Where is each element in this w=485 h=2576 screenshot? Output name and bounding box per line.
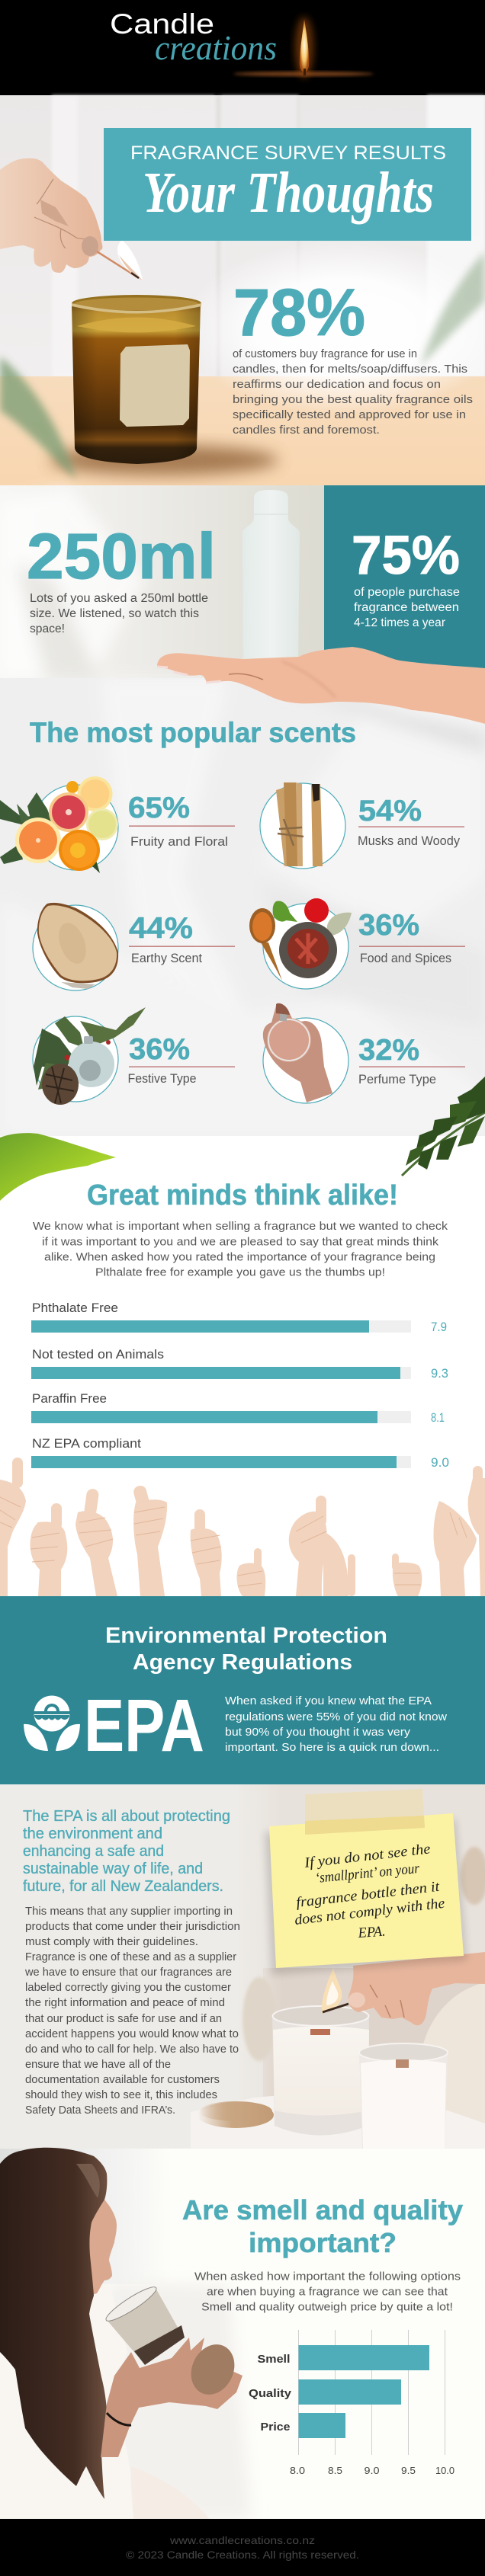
cork lid — [183, 2338, 242, 2402]
woman smelling candle photo — [0, 2148, 252, 2519]
hand holding bottle — [157, 647, 485, 724]
amber candle jar — [72, 295, 201, 464]
percent: 54% — [358, 795, 422, 827]
logo word: Candle: Candle — [110, 8, 214, 40]
axis labels: 9.0 — [365, 2465, 380, 2476]
EPA body text: that our product is safe for use and if an — [25, 2013, 222, 2025]
footer — [0, 2519, 485, 2576]
scent: festive — [33, 1007, 235, 1105]
title line 1: FRAGRANCE SURVEY RESULTS — [130, 142, 446, 164]
teal stat panel — [324, 485, 485, 672]
row: Phthalate Free: Phthalate Free — [32, 1301, 118, 1315]
note text: EPA. — [357, 1924, 386, 1941]
stat: 78%: 78% — [233, 276, 365, 350]
icon: candle flame — [233, 17, 374, 78]
hair — [0, 2148, 107, 2499]
row: NZ EPA compliant: NZ EPA compliant — [32, 1436, 141, 1451]
note text: ‘smallprint’ on your — [314, 1861, 420, 1886]
white bottle — [242, 490, 300, 661]
row: Phthalate Free — [31, 1301, 447, 1334]
description: When asked how important the following options — [194, 2270, 461, 2283]
right blurred leaf — [421, 251, 485, 366]
note text: fragrance bottle then it — [295, 1879, 441, 1911]
78% description: reaffirms our dedication and focus on — [233, 379, 441, 391]
note text — [294, 1841, 445, 1941]
row: Paraffin Free — [31, 1391, 445, 1425]
icon: spices — [249, 898, 352, 981]
note text: does not comply with the — [294, 1896, 445, 1928]
EPA body text: we have to ensure that our fragrances are — [24, 1966, 232, 1979]
description: are when buying a fragrance we can see that — [207, 2286, 448, 2298]
percent: 36% — [129, 1033, 190, 1066]
250ml description: size. We listened, so watch this — [30, 607, 199, 620]
EPA wordmark: EPA — [84, 1684, 204, 1767]
intro paragraph: Plthalate free for example you gave us the thumbs up! — [95, 1266, 385, 1278]
axis labels: 8.0 — [290, 2465, 305, 2476]
candle label — [120, 344, 190, 427]
stat: 75%: 75% — [352, 526, 460, 586]
face — [76, 2194, 117, 2296]
row: NZ EPA compliant — [31, 1436, 449, 1470]
shirt — [0, 2283, 133, 2519]
78% description — [233, 348, 473, 437]
axis labels — [290, 2465, 454, 2476]
EPA body text — [24, 1906, 240, 2117]
bar: smell — [299, 2345, 429, 2370]
75% description — [354, 586, 460, 629]
panel: great minds think alike — [0, 1077, 485, 1596]
icon: citrus fruit — [0, 776, 118, 873]
EPA body text: the right information and peace of mind — [25, 1997, 225, 2009]
footer: www.candlecreations.co.nz — [169, 2534, 315, 2546]
row: Not tested on Animals: 9.3 — [431, 1366, 448, 1381]
bar: quality — [299, 2379, 401, 2405]
EPA body text: documentation available for customers — [25, 2074, 220, 2086]
EPA body text: accident happens you would know what to — [25, 2028, 239, 2040]
scent: food and spices — [249, 898, 465, 989]
table — [191, 2091, 485, 2149]
note text: If you do not see the — [303, 1841, 431, 1871]
250ml description — [30, 592, 208, 635]
row: Not tested on Animals: Not tested on Animals — [32, 1347, 164, 1362]
dried grasses — [242, 1977, 276, 2061]
78% description: candles, then for melts/soap/diffusers. This — [233, 363, 467, 376]
EPA highlighted statement: The EPA is all about protecting — [23, 1807, 230, 1825]
logo word: creations: creations — [155, 28, 277, 67]
EPA body text: labeled correctly giving you the customer — [25, 1982, 231, 1994]
EPA intro text: important. So here is a quick run down... — [225, 1741, 439, 1754]
250ml description: Lots of you asked a 250ml bottle — [30, 592, 208, 605]
EPA body text: products that come under their jurisdiction — [25, 1921, 240, 1933]
scent: perfume — [263, 1003, 465, 1103]
hand holding note — [348, 1952, 485, 2025]
header band — [0, 0, 485, 95]
75% description: fragrance between — [354, 601, 459, 614]
icon: EPA flower logo — [24, 1696, 80, 1751]
percent: 65% — [128, 792, 190, 824]
vase — [422, 1982, 485, 2123]
row: Phthalate Free: 7.9 — [431, 1320, 447, 1334]
label: Perfume Type — [358, 1073, 436, 1086]
intro paragraph: We know what is important when selling a fragrance but we wanted to check — [33, 1221, 448, 1233]
bar chart: ratings — [31, 1301, 449, 1470]
thumbs up hands — [0, 1458, 485, 1596]
intro paragraph: if it was important to you and we are pleased to say that great minds think — [42, 1236, 439, 1248]
EPA highlighted statement: future, for all New Zealanders. — [23, 1877, 223, 1895]
intro paragraph — [33, 1221, 448, 1278]
row: NZ EPA compliant: 9.0 — [431, 1455, 449, 1470]
icon: fern leaf — [402, 1077, 485, 1176]
scent: musks and woody — [260, 782, 464, 869]
EPA intro text: but 90% of you thought it was very — [225, 1726, 411, 1739]
sticky note — [265, 1789, 467, 1975]
percent: 32% — [358, 1034, 419, 1067]
heading: Are smell and quality — [182, 2194, 463, 2226]
hand holding match — [0, 158, 143, 280]
row: Not tested on Animals — [31, 1347, 448, 1381]
candle jar 1 — [272, 2006, 369, 2135]
EPA intro text — [225, 1694, 447, 1754]
75% description: 4-12 times a year — [354, 616, 445, 629]
bar labels — [249, 2353, 292, 2434]
axis labels: 8.5 — [328, 2465, 342, 2476]
tape — [305, 1789, 425, 1835]
heading: Great minds think alike! — [87, 1179, 398, 1211]
EPA intro text: When asked if you knew what the EPA — [225, 1694, 432, 1707]
stat: 250ml: 250ml — [27, 520, 216, 592]
EPA highlighted statement: sustainable way of life, and — [23, 1860, 203, 1877]
icon: holly, bauble and pine cone — [34, 1007, 146, 1105]
bar labels: Price — [261, 2421, 290, 2434]
flame and match — [322, 1968, 348, 2013]
left blurred leaf — [0, 357, 76, 480]
panel: most popular scents — [0, 647, 485, 1136]
percent: 36% — [358, 909, 419, 942]
heading — [105, 1624, 387, 1675]
EPA body text: must comply with their guidelines. — [25, 1936, 198, 1948]
arms and hands — [101, 2338, 242, 2457]
EPA body text: do and who to call for help. We also have to — [25, 2043, 239, 2056]
icon: hand with perfume — [263, 1003, 332, 1102]
78% description: candles first and foremost. — [233, 424, 380, 437]
icon: wood slice — [37, 903, 118, 989]
78% description: bringing you the best quality fragrance oils — [233, 394, 473, 406]
footer: © 2023 Candle Creations. All rights reserved. — [126, 2549, 359, 2561]
description: Smell and quality outweigh price by quite a lot! — [201, 2301, 453, 2313]
bar labels: Quality — [249, 2387, 292, 2400]
intro paragraph: alike. When asked how you rated the importance of your fragrance being — [44, 1251, 435, 1263]
title box — [104, 128, 471, 241]
label: Fruity and Floral — [130, 835, 228, 849]
label: Musks and Woody — [358, 834, 461, 848]
axis labels: 9.5 — [401, 2465, 416, 2476]
panel: smell and quality — [0, 2148, 485, 2519]
250ml description: space! — [30, 622, 65, 635]
percent: 44% — [129, 912, 193, 945]
candle photo — [191, 1784, 485, 2149]
bar labels: Smell — [258, 2353, 290, 2366]
75% description: of people purchase — [354, 586, 460, 599]
scents heading: The most popular scents — [30, 717, 356, 748]
label: Festive Type — [128, 1072, 197, 1086]
label: Earthy Scent — [131, 952, 202, 965]
heading: Environmental Protection — [105, 1624, 387, 1648]
row: Paraffin Free: Paraffin Free — [32, 1391, 107, 1406]
row: Paraffin Free: 8.1 — [431, 1410, 445, 1425]
panel: bottle size — [0, 485, 485, 678]
panel: EPA explanation — [0, 1784, 485, 2149]
EPA highlighted statement — [23, 1807, 230, 1895]
heading — [182, 2194, 463, 2258]
EPA body text: Fragrance is one of these and as a supplier — [25, 1951, 236, 1963]
EPA highlighted statement: enhancing a safe and — [23, 1842, 164, 1860]
EPA highlighted statement: the environment and — [23, 1825, 162, 1842]
scent: fruity and floral — [0, 776, 235, 873]
candle jar 2 — [359, 2043, 448, 2149]
bracelet — [107, 2413, 131, 2425]
EPA body text: Safety Data Sheets and IFRA’s. — [25, 2104, 175, 2117]
label: Food and Spices — [360, 952, 451, 965]
scent: earthy — [33, 903, 235, 990]
lap — [131, 2466, 210, 2519]
cork lid — [198, 2101, 274, 2128]
heading: Agency Regulations — [133, 1650, 352, 1675]
EPA body text: should they wish to see it, this includes — [25, 2089, 217, 2101]
bar chart: importance — [249, 2330, 454, 2476]
bar: price — [299, 2413, 345, 2438]
EPA intro text: regulations were 55% of you did not know — [225, 1710, 447, 1723]
jar shadow — [50, 445, 278, 475]
78% description: specifically tested and approved for use in — [233, 409, 466, 421]
78% description: of customers buy fragrance for use in — [233, 348, 417, 360]
burning match — [97, 251, 139, 278]
panel: EPA regulations — [0, 1596, 485, 1784]
candle jar — [103, 2283, 185, 2365]
curtain backdrop — [0, 2149, 172, 2284]
circle — [33, 785, 118, 870]
EPA body text: ensure that we have all of the — [25, 2059, 171, 2071]
description — [194, 2270, 461, 2313]
icon: palo santo sticks — [276, 782, 323, 866]
icon: green leaf — [0, 1133, 116, 1201]
axis labels: 10.0 — [435, 2465, 454, 2476]
EPA body text: This means that any supplier importing in — [25, 1906, 233, 1918]
panel: candle lighting hero — [0, 95, 485, 486]
heading: important? — [249, 2227, 397, 2258]
